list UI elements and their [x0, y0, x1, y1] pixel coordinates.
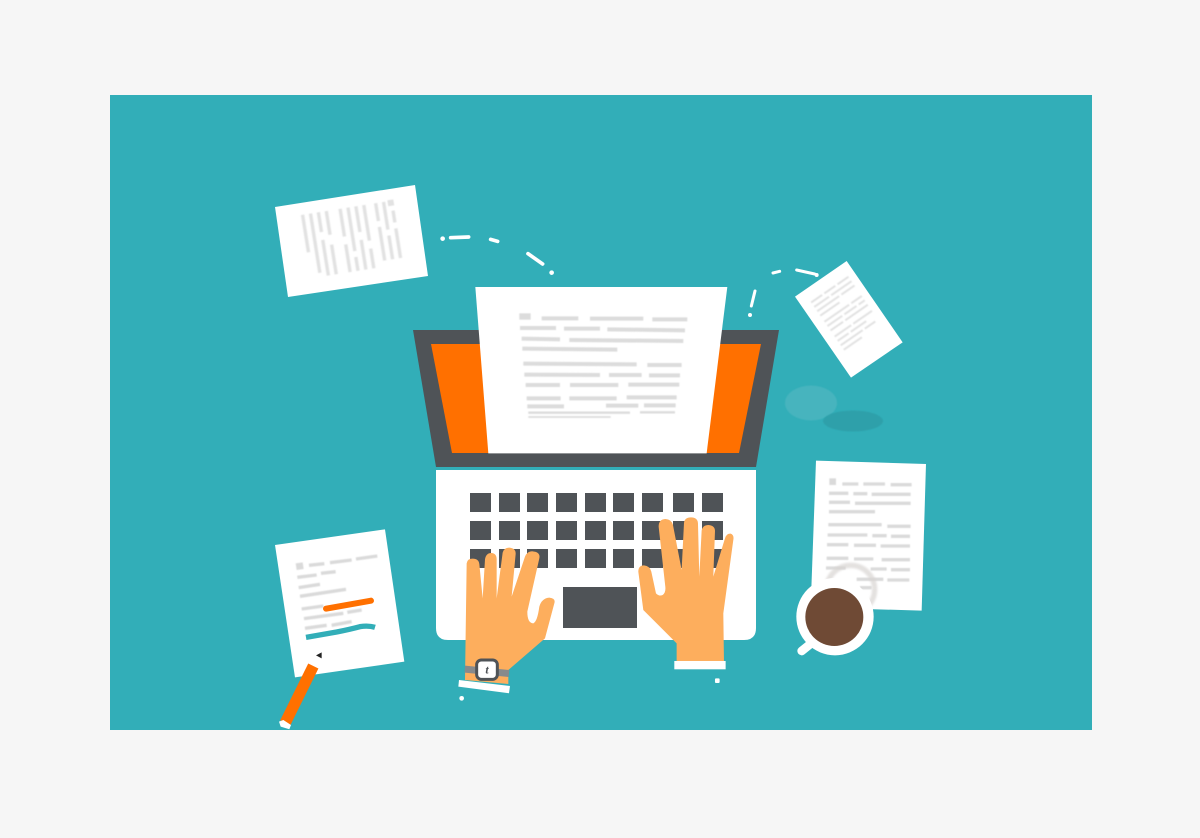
screen orange display [431, 344, 761, 453]
panel: teal background [110, 95, 1092, 730]
document: main paper coming out of the screen [475, 287, 727, 453]
left dot [459, 696, 464, 701]
left cuff [458, 680, 510, 693]
right dot [715, 678, 720, 683]
document: top-left rotated paper [275, 185, 428, 297]
teal underline [306, 626, 375, 637]
coffee ring stain [827, 565, 875, 613]
document: bottom-left annotated paper [275, 529, 404, 729]
right cuff [674, 661, 726, 669]
laptop base [436, 470, 756, 640]
keyboard keys [470, 493, 723, 568]
laptop screen [413, 330, 779, 467]
decoration: light blob [785, 386, 837, 420]
watch glyph: t [485, 663, 489, 677]
document: top-right rotated paper [795, 261, 903, 378]
right hand [638, 517, 734, 683]
orange highlight [326, 601, 371, 609]
left hand with watch [458, 548, 555, 701]
pencil [279, 652, 322, 729]
watch band [465, 666, 509, 677]
document: bottom-right paper with coffee [796, 461, 926, 655]
touchpad [563, 587, 637, 628]
screen bezel [413, 330, 779, 467]
arrow: dashed arc to right paper [748, 270, 819, 317]
arrow: dashed arc to laptop from left [440, 236, 554, 275]
decoration: dark blob [823, 410, 883, 432]
watch face [477, 660, 497, 679]
coffee cup [796, 578, 874, 655]
